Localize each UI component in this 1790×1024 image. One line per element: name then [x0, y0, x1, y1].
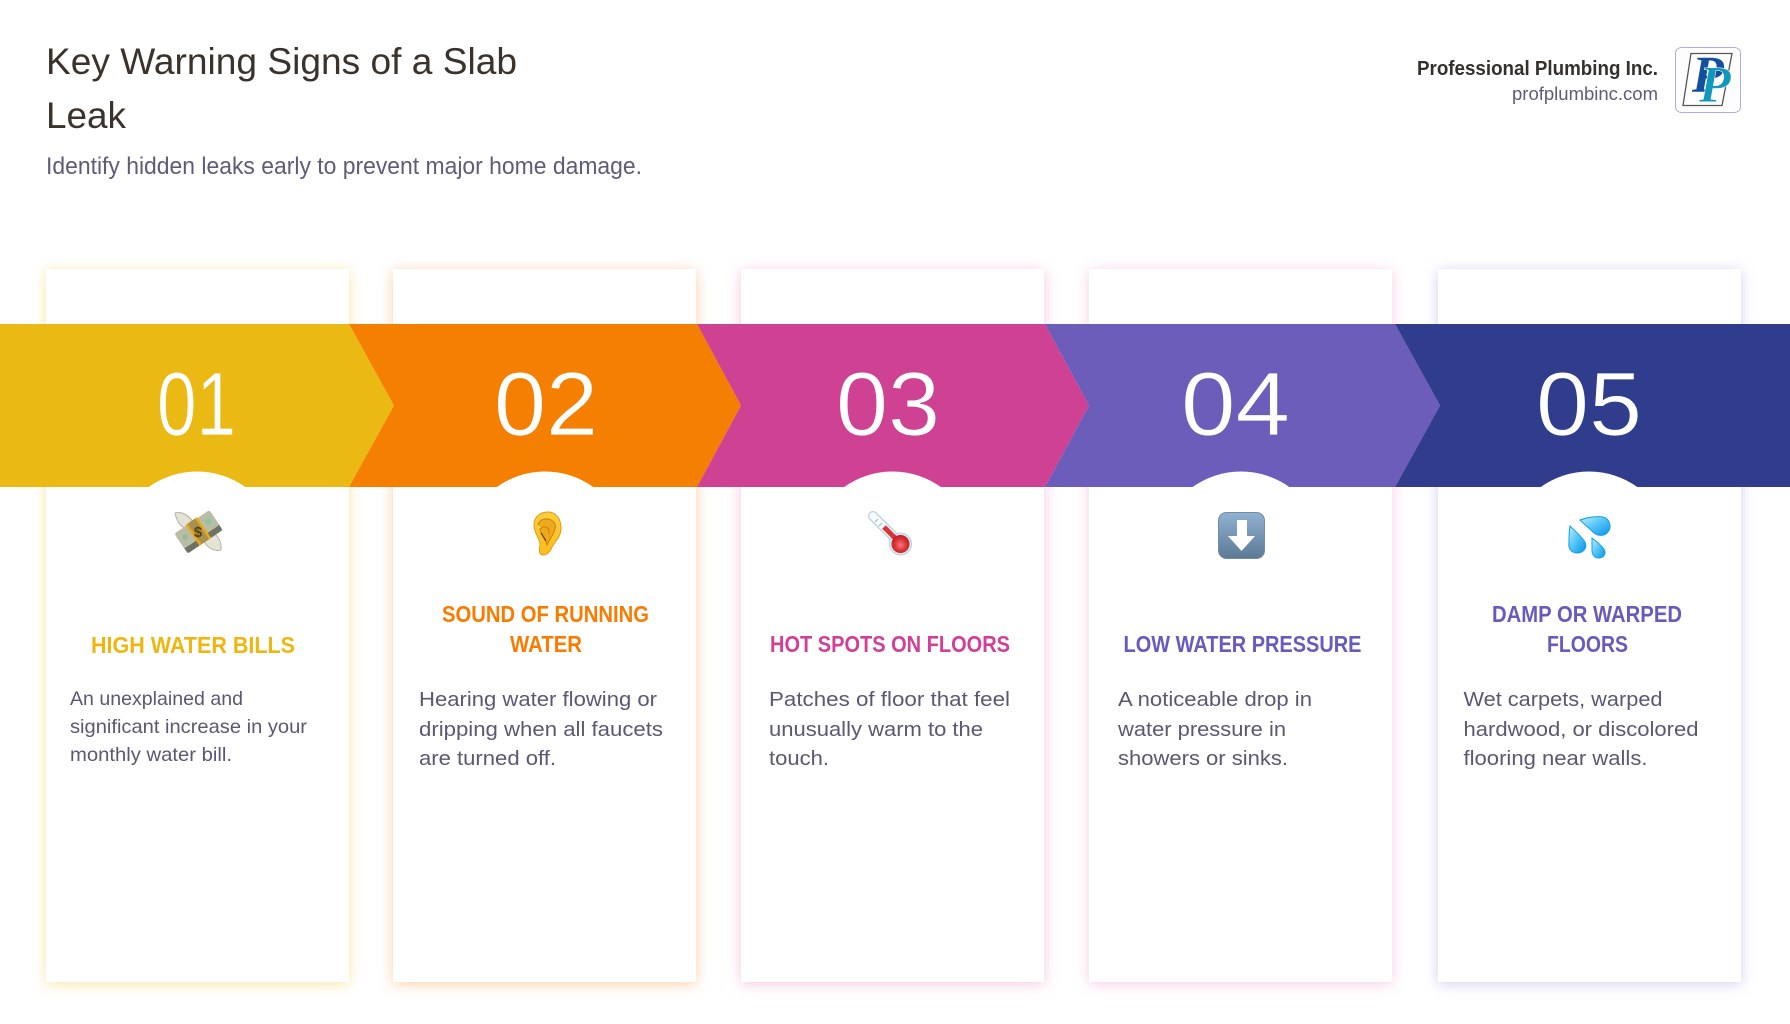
title: Leak [46, 95, 126, 136]
card 4 description [1117, 688, 1312, 770]
card 3 description [769, 688, 1010, 770]
card 1 heading: HIGH WATER BILLS [91, 632, 295, 658]
panel: card 4 low water pressure [1089, 269, 1392, 982]
card 2 description: dripping when all faucets [419, 718, 663, 741]
icon: down arrow button [1218, 512, 1264, 558]
arrow step 2 [349, 324, 741, 488]
logo: P [1691, 47, 1725, 104]
panel: card 2 sound of running water [393, 269, 696, 982]
card 4 description: A noticeable drop in [1118, 688, 1312, 711]
icon: thermometer [873, 516, 912, 555]
icon: money with wings [174, 509, 223, 554]
company website: profplumbinc.com [1512, 84, 1658, 104]
arrow step 3 [697, 324, 1089, 488]
card 5 heading [1492, 601, 1682, 657]
icon: money with wings: $ [194, 524, 203, 541]
logo [1676, 47, 1740, 114]
company name: Professional Plumbing Inc. [1417, 58, 1658, 80]
logo: P [1698, 57, 1732, 114]
card 5 description: Wet carpets, warped [1464, 688, 1662, 711]
arrow step 5 [1395, 324, 1790, 488]
card 2 description: are turned off. [419, 747, 556, 770]
card 2 description [419, 688, 663, 770]
number 02: 02 [494, 355, 598, 455]
card 5 description [1464, 688, 1698, 770]
title: Key Warning Signs of a Slab [46, 41, 517, 82]
card 2 heading [442, 601, 649, 657]
subtitle: Identify hidden leaks early to prevent major home damage. [46, 153, 642, 180]
card 3 heading: HOT SPOTS ON FLOORS [770, 631, 1010, 657]
card 1 description [70, 688, 308, 766]
icon: ear [534, 512, 561, 555]
number 01: 01 [157, 355, 236, 455]
icon notch 4 [1192, 471, 1290, 488]
card 5 heading: FLOORS [1547, 631, 1628, 657]
card 3 description: Patches of floor that feel [769, 688, 1010, 711]
card 2 heading: SOUND OF RUNNING [442, 601, 649, 627]
card 3 description: touch. [769, 747, 829, 770]
number 04: 04 [1181, 355, 1290, 455]
card 4 description: water pressure in [1117, 718, 1286, 741]
card 2 heading: WATER [510, 631, 582, 657]
card 5 heading: DAMP OR WARPED [1492, 601, 1682, 627]
card 2 description: Hearing water flowing or [419, 688, 657, 711]
number 03: 03 [836, 355, 940, 455]
card 4 description: showers or sinks. [1118, 747, 1288, 770]
icon notch 1 [148, 471, 246, 488]
number 05: 05 [1536, 355, 1642, 455]
panel: card 1 high water bills [46, 269, 349, 982]
icon notch 2 [496, 471, 594, 488]
card 3 description: unusually warm to the [769, 718, 983, 741]
icon notch 3 [844, 471, 942, 488]
card 5 description: flooring near walls. [1464, 747, 1648, 770]
panel: card 5 damp or warped floors [1438, 269, 1741, 982]
panel: card 3 hot spots on floors [741, 269, 1044, 982]
brand block [1417, 47, 1740, 114]
icon notch 5 [1540, 471, 1638, 488]
icon: sweat droplets [1569, 517, 1610, 558]
card 1 description: significant increase in your [70, 716, 308, 738]
arrow step 1 [0, 324, 394, 488]
card 1 description: monthly water bill. [70, 744, 232, 766]
card 5 description: hardwood, or discolored [1464, 718, 1698, 741]
arrow step 4 [1045, 324, 1440, 488]
card 4 heading: LOW WATER PRESSURE [1124, 631, 1362, 657]
title [46, 41, 517, 136]
card 1 description: An unexplained and [70, 688, 243, 710]
